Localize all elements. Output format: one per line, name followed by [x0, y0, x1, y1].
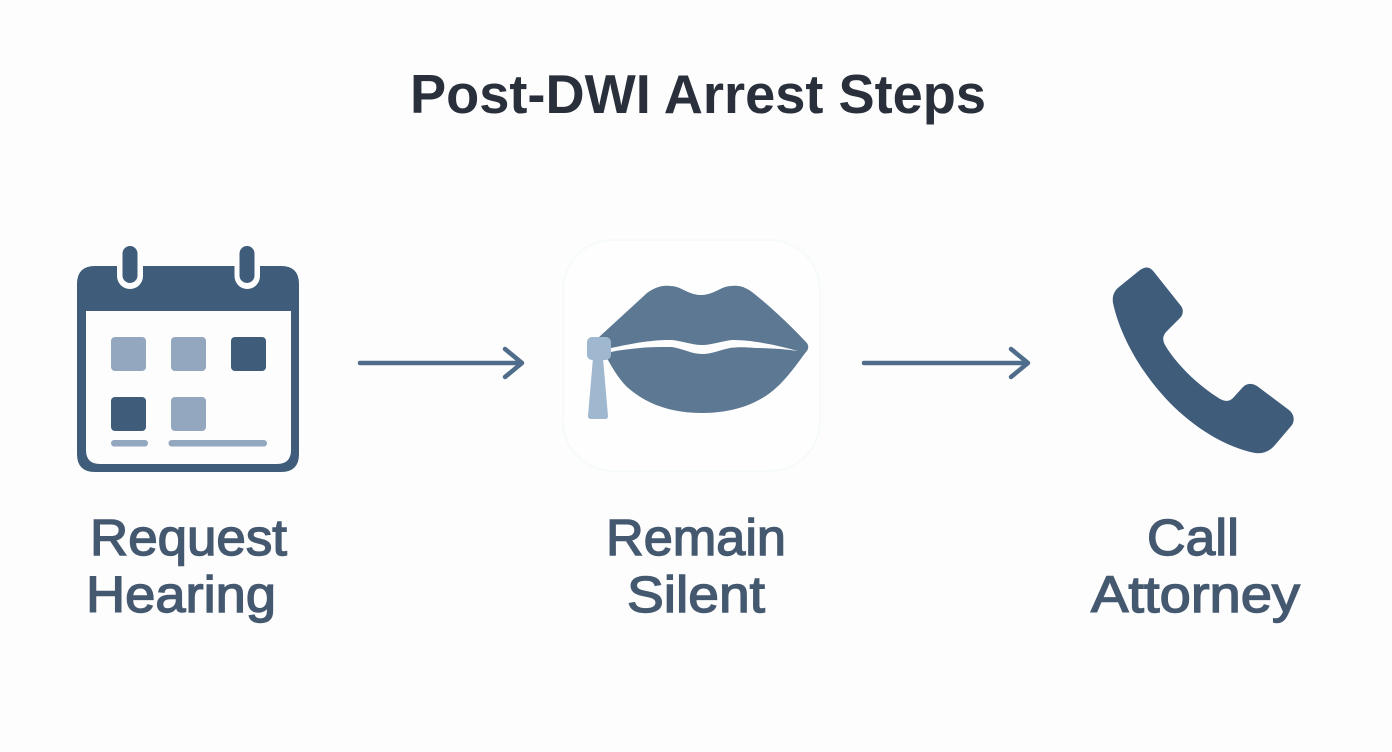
- arrow: silent to attorney: [864, 349, 1028, 377]
- arrow: hearing to silent: [360, 349, 522, 377]
- label: Remain Silent: Remain: [606, 509, 786, 566]
- label: Remain Silent: Silent: [627, 566, 765, 623]
- label: Request Hearing: Hearing: [86, 566, 276, 623]
- zipper pull: [587, 337, 611, 419]
- calendar footer lines: [111, 440, 267, 446]
- label: Call Attorney: [1091, 509, 1301, 623]
- label: Request Hearing: [86, 509, 287, 623]
- label: Call Attorney: Attorney: [1091, 566, 1301, 623]
- mouth opening: [611, 340, 798, 354]
- icon: telephone handset: [1113, 268, 1294, 453]
- calendar ring: right: [234, 246, 260, 289]
- icon: calendar: [77, 246, 299, 472]
- icon: zipped lips: [563, 240, 820, 471]
- calendar ring: left: [117, 246, 143, 289]
- label: Request Hearing: Request: [90, 509, 287, 566]
- label: Call Attorney: Call: [1147, 509, 1239, 566]
- label: Remain Silent: [606, 509, 786, 623]
- lips: [598, 286, 808, 413]
- title: Post-DWI Arrest Steps: [410, 63, 986, 125]
- calendar date squares: [111, 337, 266, 431]
